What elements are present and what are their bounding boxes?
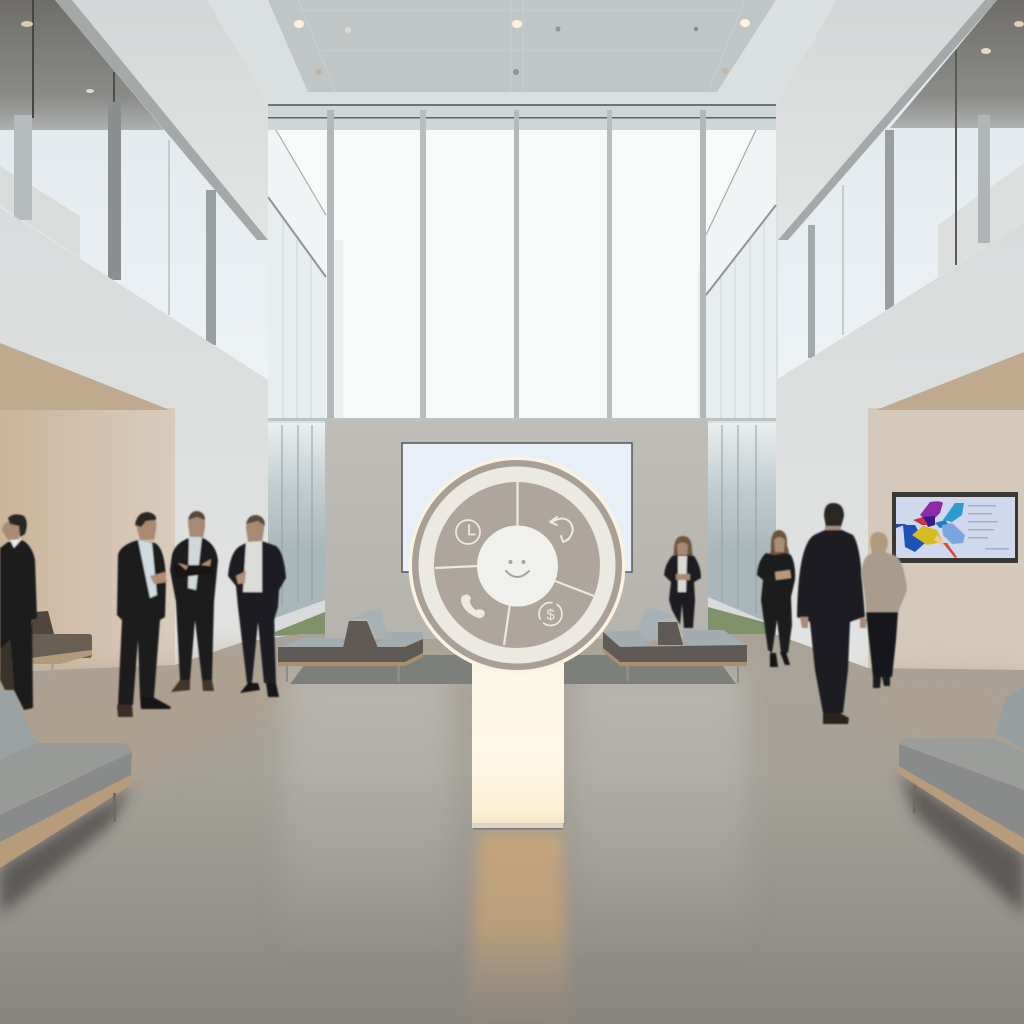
person: man with crossed arms — [170, 511, 218, 692]
icon: dollar cycle — [539, 602, 562, 626]
left upper glass gallery — [0, 0, 268, 380]
person: woman in beige — [861, 532, 907, 688]
lower side windows — [266, 423, 776, 636]
person: man in dark jacket, white shirt — [228, 515, 286, 697]
floor rug — [290, 655, 736, 684]
smiley feedback wheel — [408, 456, 626, 674]
right center sofa — [603, 608, 747, 683]
icon: dollar cycle: $ — [546, 606, 555, 624]
person: woman in black — [757, 530, 795, 667]
central partition wall — [325, 421, 708, 639]
person: man in dark suit — [117, 512, 171, 717]
right wall — [776, 223, 1024, 668]
left alcove — [0, 343, 175, 670]
right alcove — [868, 352, 1024, 670]
far left bench — [26, 611, 92, 678]
floor — [0, 634, 1024, 1024]
upper left wall band — [55, 0, 268, 240]
person: far left man — [0, 514, 37, 710]
central window wall — [268, 104, 776, 422]
foreground right sofa — [898, 687, 1024, 915]
left center sofa — [278, 610, 423, 682]
icon: return arrows — [550, 517, 573, 542]
projection screen — [402, 443, 632, 572]
person: man from behind — [797, 503, 867, 724]
right upper glass gallery — [778, 0, 1024, 380]
glowing kiosk post — [472, 660, 564, 830]
icon: clock — [456, 520, 480, 544]
wall TV with abstract graphic — [892, 492, 1018, 563]
person: woman by screen — [664, 536, 701, 628]
foreground left sofa — [0, 690, 132, 915]
upper right wall band — [777, 0, 997, 240]
ceiling recess — [268, 0, 776, 92]
icon: telephone — [462, 595, 484, 617]
smiley centre — [477, 526, 558, 606]
left wall — [0, 207, 268, 668]
floor glow under post — [468, 832, 570, 1024]
